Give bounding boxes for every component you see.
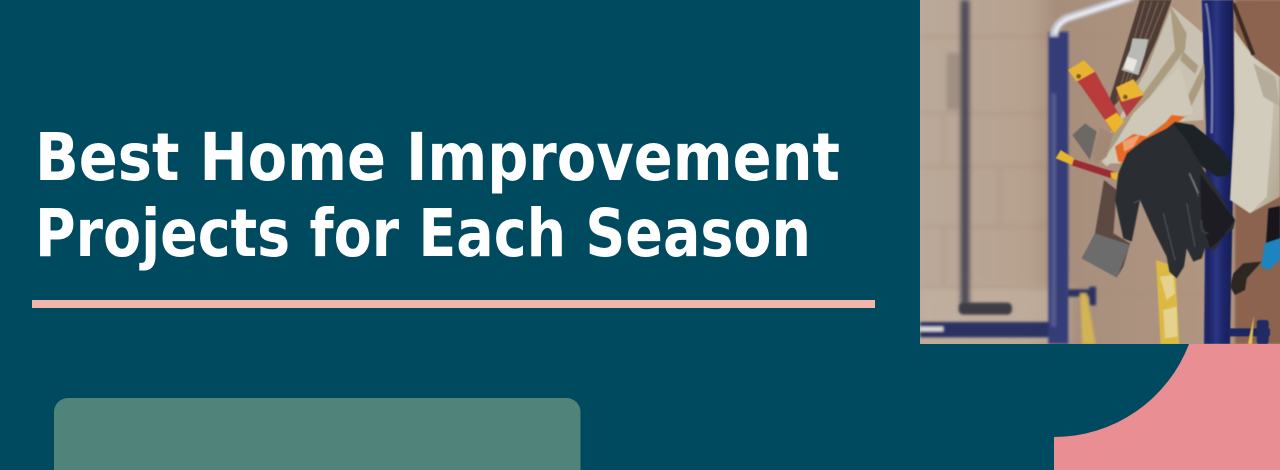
main blue pole	[1202, 0, 1270, 344]
blurred wall	[920, 0, 1280, 344]
green panel	[54, 398, 580, 470]
yellow stick	[1156, 260, 1179, 344]
title	[35, 119, 840, 272]
right edge tools	[1230, 206, 1280, 295]
tool bag, right of pole	[1229, 2, 1280, 214]
photo: tool belt and gloves on scaffold	[920, 0, 1280, 344]
title underline	[32, 300, 875, 308]
title: Projects for Each Season	[35, 195, 811, 272]
screwdrivers and hammer	[1056, 60, 1144, 181]
blurred scaffold frame	[920, 0, 1133, 344]
pink corner shape	[1054, 344, 1280, 470]
title: Best Home Improvement	[35, 119, 840, 196]
leather belt	[1082, 0, 1172, 277]
blurred background pipe	[947, 0, 969, 307]
work gloves	[1115, 115, 1235, 278]
bag flaps	[1092, 5, 1205, 163]
bag behind pole	[1097, 7, 1203, 167]
